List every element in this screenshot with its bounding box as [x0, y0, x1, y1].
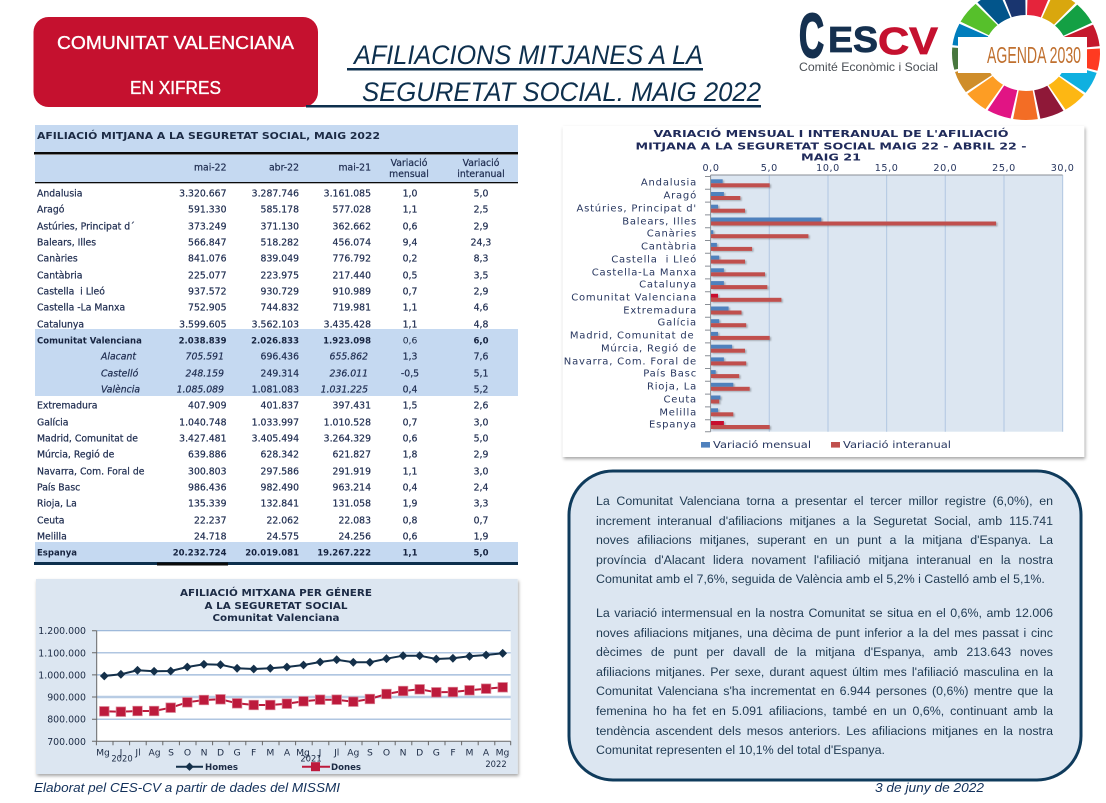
category labels: Castella i Lleó [611, 254, 697, 266]
month labels: D [416, 748, 423, 758]
row: Castella i Lleó: 910.989 [333, 286, 371, 298]
row: Castella-La Manxa: 1,1 [403, 302, 417, 314]
row: Melilla: 1,9 [474, 532, 488, 542]
row: Melilla [37, 532, 488, 542]
x axis labels: 25,0 [992, 163, 1016, 174]
row: Navarra: 3,0 [474, 466, 488, 478]
text block: commentary: noves afiliacions mitjanes, una dècima de punt inferior a la del mes passat i cinc [596, 626, 1053, 640]
row: País Basc [37, 482, 488, 494]
category labels: Aragó [663, 190, 697, 202]
month labels: M [466, 748, 474, 758]
text block: commentary: província d'Alacant lidera novament l'afiliació mitjana interanual en la nostra [596, 553, 1053, 567]
text block: commentary: La variació intermensual en la nostra Comunitat se situa en el 0,6%, amb 12.006 [596, 606, 1053, 620]
row: País Basc: 986.436 [188, 482, 227, 494]
row: Aragó: Aragó [37, 204, 65, 216]
row: Navarra: Navarra, Com. Foral de [37, 466, 145, 478]
panel: commentary box [569, 471, 1081, 780]
row: Balears [37, 238, 491, 248]
title: AFILIACIONS MITJANES A LA [352, 40, 703, 70]
row: Espanya: Espanya [37, 548, 77, 558]
row: Rioja: 135.339 [188, 498, 227, 510]
year labels [111, 754, 507, 769]
category labels: Castella-La Manxa [592, 268, 697, 279]
x axis labels: 30,0 [1051, 163, 1074, 174]
title: SEGURETAT SOCIAL. MAIG 2022 [362, 77, 761, 107]
row: Canàries: 839.049 [261, 254, 299, 264]
row: Extremadura: 401.837 [261, 400, 299, 412]
category labels: Madrid, Comunitat de [570, 331, 694, 342]
logo: CES-CV: ES [828, 19, 878, 60]
year labels: 2020 [111, 754, 133, 764]
row: Andalusia: 3.287.746 [252, 188, 299, 200]
category labels: Catalunya [639, 280, 697, 291]
row: València: València [101, 384, 140, 396]
month labels: J [119, 748, 122, 758]
row: Castella i Lleó: 0,7 [403, 286, 417, 298]
row: Madrid: 5,0 [474, 434, 488, 444]
row: Comunitat Valenciana: 0,6 [403, 336, 417, 346]
row: Madrid: 3.264.329 [324, 434, 371, 444]
month labels: S [367, 748, 373, 758]
month labels: G [433, 748, 440, 758]
row: Galícia [37, 418, 488, 428]
month labels: O [184, 748, 191, 758]
month labels [96, 748, 509, 758]
year labels: 2022 [485, 759, 507, 769]
panel: affiliation by gender line chart [36, 579, 518, 774]
month labels: A [284, 748, 291, 758]
row: Ceuta: 22.083 [338, 516, 371, 526]
month labels: O [383, 748, 390, 758]
row: Cantàbria: 0,5 [403, 270, 417, 282]
logo: CES-CV: CV [878, 21, 939, 63]
category labels: Melilla [659, 408, 697, 419]
row: Múrcia [37, 450, 488, 460]
row: Galícia: 1.040.748 [179, 418, 227, 428]
row: Catalunya: 3.562.103 [252, 320, 299, 330]
row: Canàries [37, 254, 488, 264]
row: València: 5,2 [474, 384, 488, 396]
row: Cantàbria [37, 270, 488, 282]
category labels: Navarra, Com. Foral de [564, 357, 697, 368]
row: Múrcia: 639.886 [188, 450, 227, 460]
row: Castella i Lleó: 930.729 [261, 286, 299, 298]
x axis labels: 5,0 [761, 163, 778, 174]
y axis labels [38, 626, 86, 748]
row: Balears: Balears, Illes [37, 238, 96, 248]
legend: Variació mensual [713, 439, 811, 451]
table header [194, 158, 505, 180]
month labels: F [450, 748, 456, 758]
category labels: Rioja, La [647, 382, 697, 393]
month labels: Mg [496, 748, 509, 758]
row: Múrcia: 621.827 [333, 450, 371, 460]
row: Astúries [37, 222, 488, 232]
month labels: Mg [96, 748, 110, 758]
text block: commentary: dècimes de punt per davall de la mitjana d'Espanya, amb 213.643 noves [596, 645, 1053, 659]
row: Navarra: 1,1 [403, 466, 417, 478]
row: Balears: 9,4 [403, 238, 417, 248]
year labels: 2021 [300, 754, 322, 764]
x axis labels: 10,0 [816, 163, 840, 174]
row: Comunitat Valenciana: 1.923.098 [323, 336, 371, 346]
legend: Variació interanual [843, 439, 951, 451]
category labels: Balears, Illes [622, 217, 697, 228]
row: País Basc: País Basc [37, 482, 80, 494]
row: Espanya [37, 548, 489, 558]
legend: Dones [302, 762, 361, 773]
row: Extremadura: 2,6 [474, 400, 488, 412]
category labels: Cantàbria [641, 241, 697, 253]
line: Homes [104, 653, 503, 676]
row: Castella i Lleó: 2,9 [474, 286, 488, 298]
row: Comunitat Valenciana [37, 336, 489, 346]
text block: commentary: noves afiliacions mitjanes, superant en un punt a la mitjana d'Espanya. La [596, 533, 1053, 547]
table title: AFILIACIÓ MITJANA A LA SEGURETAT SOCIAL, MAIG 2022 [37, 130, 380, 142]
chart title: Comunitat Valenciana [212, 613, 340, 624]
row: Canàries: 841.076 [188, 254, 227, 264]
row: Madrid: 3.427.481 [179, 434, 227, 444]
row: Balears: 24,3 [471, 238, 491, 248]
row: País Basc: 982.490 [261, 482, 299, 494]
text block: commentary: tendència ascendent dels mesos anteriors. Les afiliacions mitjanes en la nostra [596, 724, 1053, 738]
month labels: M [266, 748, 274, 758]
text block: commentary: Comunitat representen el 10,1% del total d'Espanya. [596, 743, 885, 757]
legend: Dones: Dones [331, 762, 361, 773]
row: Alacant: 7,6 [474, 352, 488, 362]
month labels: Ag [347, 748, 359, 758]
legend: Homes: Homes [205, 762, 238, 773]
row: Ceuta [37, 516, 488, 526]
row: Astúries: 362.662 [333, 222, 371, 232]
row: Aragó: 2,5 [474, 204, 488, 216]
chart title: AFILIACIÓ MITXANA PER GÉNERE [180, 586, 372, 599]
row: Catalunya: 3.435.428 [324, 320, 371, 330]
row: Rioja [37, 498, 488, 510]
row: Astúries: 0,6 [403, 222, 417, 232]
row: Extremadura: 1,5 [403, 400, 417, 412]
row: Galícia: 0,7 [403, 418, 417, 428]
month labels: G [233, 748, 241, 758]
month labels: N [400, 748, 406, 758]
row: Madrid: 0,6 [403, 434, 417, 444]
icon: Agenda 2030 wheel [944, 0, 1106, 127]
row: Ceuta: 0,8 [403, 516, 417, 526]
month labels: F [251, 748, 256, 758]
row: Balears: 518.282 [261, 238, 299, 248]
x axis labels [702, 163, 1074, 174]
month labels: D [217, 748, 224, 758]
row: Aragó [37, 204, 488, 216]
table header: interanual [457, 169, 505, 180]
row: Castella i Lleó: Castella i Lleó [37, 286, 105, 298]
badge: Comunitat Valenciana en xifres: EN XIFRES [130, 78, 221, 98]
row: Castella i Lleó: 937.572 [188, 286, 226, 298]
text block: commentary: afiliacions mitjanes. Per sexe, durant aquest últim mes l'afiliació masculina en la [596, 665, 1053, 679]
y axis labels: 900.000 [47, 692, 86, 704]
category labels: Múrcia, Regió de [601, 343, 697, 355]
chart title [636, 127, 1026, 164]
row: Ceuta: 22.062 [266, 516, 299, 526]
badge: Comunitat Valenciana en xifres: COMUNITAT VALENCIANA [57, 33, 294, 53]
plot area [92, 631, 511, 745]
chart title [180, 586, 372, 624]
x axis labels: 20,0 [933, 163, 957, 174]
line: Dones [104, 687, 503, 712]
row: Galícia: Galícia [37, 418, 68, 428]
row: Espanya: 20.232.724 [173, 548, 227, 558]
text block: commentary: Comunitat Valenciana s'ha incrementat en 6.944 persones (0,6%) mentre que la [596, 684, 1053, 698]
legend [701, 439, 951, 451]
y axis labels: 1.200.000 [38, 626, 86, 637]
table header: abr-22 [269, 162, 299, 174]
month labels: N [201, 748, 207, 758]
row: Ceuta: Ceuta [37, 516, 64, 526]
text block: commentary: increment interanual d'afiliacions mitjanes a la Seguretat Social, amb 115.741 [596, 514, 1053, 528]
row: Astúries: 373.249 [188, 222, 227, 232]
x axis labels: 0,0 [702, 163, 720, 174]
row: Espanya: 20.019.081 [245, 548, 299, 558]
legend: Homes [176, 762, 238, 773]
source note: Elaborat pel CES-CV a partir de dades del MISSMI [34, 781, 341, 795]
category labels: Galícia [658, 317, 697, 329]
logo: CES-CV [799, 2, 939, 74]
row: País Basc: 2,4 [474, 482, 488, 494]
text block: commentary: femenina ho ha fet en 5.091 afiliacions, també en un 0,6%, continuant amb la [596, 704, 1053, 718]
row: Aragó: 585.178 [261, 204, 299, 216]
badge: Comunitat Valenciana en xifres [34, 17, 318, 107]
row: Comunitat Valenciana: 6,0 [473, 336, 489, 346]
row: Astúries: Astúries, Principat d´ [37, 222, 135, 232]
row: Navarra: 297.586 [261, 466, 299, 478]
yearly variation bars [711, 183, 996, 429]
y axis labels: 1.000.000 [38, 670, 86, 681]
row: Castelló: 5,1 [474, 368, 488, 380]
row: Cantàbria: 217.440 [333, 270, 371, 282]
row: Castelló: 249.314 [261, 368, 299, 380]
table bands [34, 125, 518, 566]
month labels: Jl [134, 748, 141, 758]
plot area [705, 175, 1063, 432]
row: Alacant: Alacant [100, 352, 136, 362]
row: Madrid: 3.405.494 [252, 434, 299, 444]
row: Aragó: 1,1 [403, 204, 417, 216]
row: Múrcia: 628.342 [261, 450, 299, 460]
row: Catalunya: 3.599.605 [179, 320, 227, 330]
row: Extremadura: 407.909 [188, 400, 227, 412]
row: Múrcia: Múrcia, Regió de [37, 450, 115, 460]
row: Castella-La Manxa: Castella -La Manxa [37, 302, 125, 314]
row: Extremadura: Extremadura [37, 400, 97, 412]
y axis labels: 1.100.000 [38, 648, 86, 659]
row: Astúries: 2,9 [474, 222, 488, 232]
row: Alacant: 705.591 [186, 352, 224, 362]
table header: mai-22 [194, 162, 226, 174]
category labels: Ceuta [663, 395, 697, 406]
month labels: Jl [333, 748, 339, 758]
row: Catalunya: 1,1 [403, 320, 417, 330]
row: Andalusia: Andalusia [37, 188, 82, 200]
row: Cantàbria: 3,5 [474, 270, 488, 282]
row: Catalunya: Catalunya [37, 320, 84, 330]
row: Múrcia: 1,8 [403, 450, 417, 460]
row: Rioja: 1,9 [403, 498, 417, 510]
row: Canàries: Canàries [37, 254, 78, 264]
panel: affiliation table [34, 125, 518, 566]
row: Castelló: Castelló [101, 368, 139, 380]
row: Castella-La Manxa: 752.905 [188, 302, 227, 314]
row: Andalusia: 5,0 [474, 188, 488, 200]
month labels: Ag [148, 748, 161, 758]
panel: monthly and yearly variation bar chart [563, 126, 1084, 457]
y axis labels: 700.000 [47, 737, 86, 748]
row: Ceuta: 0,7 [474, 516, 488, 526]
row: Extremadura [37, 400, 488, 412]
table header: mensual [389, 169, 429, 180]
category labels: País Basc [643, 368, 697, 380]
row: Melilla: 24.718 [194, 532, 227, 542]
row: Andalusia: 1,0 [403, 188, 417, 200]
title [306, 40, 761, 108]
row: Castelló: -0,5 [401, 368, 419, 380]
month labels: J [318, 748, 321, 758]
date: 3 de juny de 2022 [875, 781, 984, 795]
row: Navarra: 291.919 [333, 466, 371, 478]
row: Alacant: 1,3 [403, 352, 417, 362]
row: València: 0,4 [403, 384, 417, 396]
row: Galícia: 1.010.528 [324, 418, 371, 428]
row: Comunitat Valenciana: 2.026.833 [251, 336, 299, 346]
row: Melilla: 0,6 [403, 532, 417, 542]
row: Melilla: Melilla [37, 532, 67, 542]
row: Aragó: 591.330 [188, 204, 227, 216]
row: València: 1.085.089 [177, 384, 224, 396]
row: Aragó: 577.028 [333, 204, 371, 216]
row: Galícia: 1.033.997 [252, 418, 299, 428]
chart title: VARIACIÓ MENSUAL I INTERANUAL DE L'AFILIACIÓ [654, 127, 1008, 140]
row: Andalusia: 3.320.667 [179, 188, 227, 200]
chart title: A LA SEGURETAT SOCIAL [204, 601, 348, 612]
row: València [101, 384, 488, 396]
row: Melilla: 24.256 [338, 532, 371, 542]
table header: mai-21 [338, 162, 371, 174]
row: Castella-La Manxa: 719.981 [333, 302, 371, 314]
text block: commentary: Comunitat amb el 7,6%, seguida de València amb el 5,2% i Castelló amb el 5,1%. [596, 572, 1045, 586]
row: Múrcia: 2,9 [474, 450, 488, 460]
row: Espanya: 19.267.222 [317, 548, 371, 558]
row: Canàries: 776.792 [333, 254, 371, 264]
category labels: Andalusia [641, 178, 697, 189]
row: Andalusia [37, 188, 488, 200]
row: Rioja: 3,3 [474, 498, 488, 510]
table header: Variació [463, 158, 500, 169]
row: Astúries: 371.130 [261, 222, 299, 232]
text block: commentary [596, 494, 1053, 757]
logo: CES-CV: Comité Econòmic i Social [799, 60, 938, 74]
month labels: A [483, 748, 490, 758]
row: Catalunya [37, 320, 488, 330]
month labels: S [168, 748, 174, 758]
table header: Variació [391, 158, 428, 169]
row: Rioja: 132.841 [261, 498, 299, 510]
chart title: MAIG 21 [801, 152, 861, 164]
row: Canàries: 8,3 [474, 254, 488, 264]
row: Galícia: 3,0 [474, 418, 488, 428]
row: Castelló: 248.159 [186, 368, 224, 380]
category labels [564, 178, 697, 431]
row: Melilla: 24.575 [266, 532, 299, 542]
category labels: Canàries [647, 228, 697, 240]
row: Castella-La Manxa: 4,6 [474, 302, 488, 314]
row: Extremadura: 397.431 [333, 400, 371, 412]
row: Navarra [37, 466, 488, 478]
row: Castella i Lleó [37, 286, 488, 298]
row: Canàries: 0,2 [403, 254, 417, 264]
row: Alacant: 655.862 [330, 352, 368, 362]
row: Andalusia: 3.161.085 [324, 188, 371, 200]
row: Catalunya: 4,8 [474, 320, 488, 330]
row: Balears: 566.847 [188, 238, 227, 248]
y axis labels: 800.000 [47, 715, 86, 726]
row: Navarra: 300.803 [188, 466, 227, 478]
row: Rioja: 131.058 [333, 498, 371, 510]
monthly variation bars [711, 179, 821, 425]
row: Castelló [101, 368, 488, 380]
row: Balears: 456.074 [333, 238, 371, 248]
month labels: Mg [296, 748, 310, 758]
row: Espanya: 1,1 [402, 548, 418, 558]
row: Rioja: Rioja, La [37, 498, 77, 510]
category labels: Espanya [649, 420, 697, 431]
row: Alacant: 696.436 [261, 352, 299, 362]
row: Cantàbria: Cantàbria [37, 270, 82, 282]
x axis labels: 15,0 [875, 163, 898, 174]
row: Comunitat Valenciana: 2.038.839 [179, 336, 227, 346]
row: Castella-La Manxa [37, 302, 488, 314]
row: Castelló: 236.011 [330, 368, 368, 380]
row: Alacant [100, 352, 488, 362]
row: País Basc: 0,4 [403, 482, 417, 494]
row: País Basc: 963.214 [333, 482, 371, 494]
row: Madrid: Madrid, Comunitat de [37, 434, 138, 444]
row: València: 1.031.225 [321, 384, 368, 396]
category labels: Astúries, Principat d' [576, 203, 697, 215]
row: Cantàbria: 225.077 [188, 270, 227, 282]
row: Ceuta: 22.237 [194, 516, 227, 526]
row: Espanya: 5,0 [473, 548, 489, 558]
row: València: 1.081.083 [252, 384, 299, 396]
category labels: Extremadura [623, 306, 697, 317]
row: Madrid [37, 434, 488, 444]
text block: commentary: La Comunitat Valenciana torna a presentar el tercer millor registre (6,0%), en [596, 494, 1053, 508]
chart title: MITJANA A LA SEGURETAT SOCIAL MAIG 22 - ABRIL 22 - [636, 142, 1026, 152]
logo: CES-CV: C [799, 2, 824, 71]
category labels: Comunitat Valenciana [571, 292, 697, 303]
row: Cantàbria: 223.975 [261, 270, 299, 282]
row: Comunitat Valenciana: Comunitat Valenciana [37, 336, 142, 346]
row: Castella-La Manxa: 744.832 [261, 302, 299, 314]
